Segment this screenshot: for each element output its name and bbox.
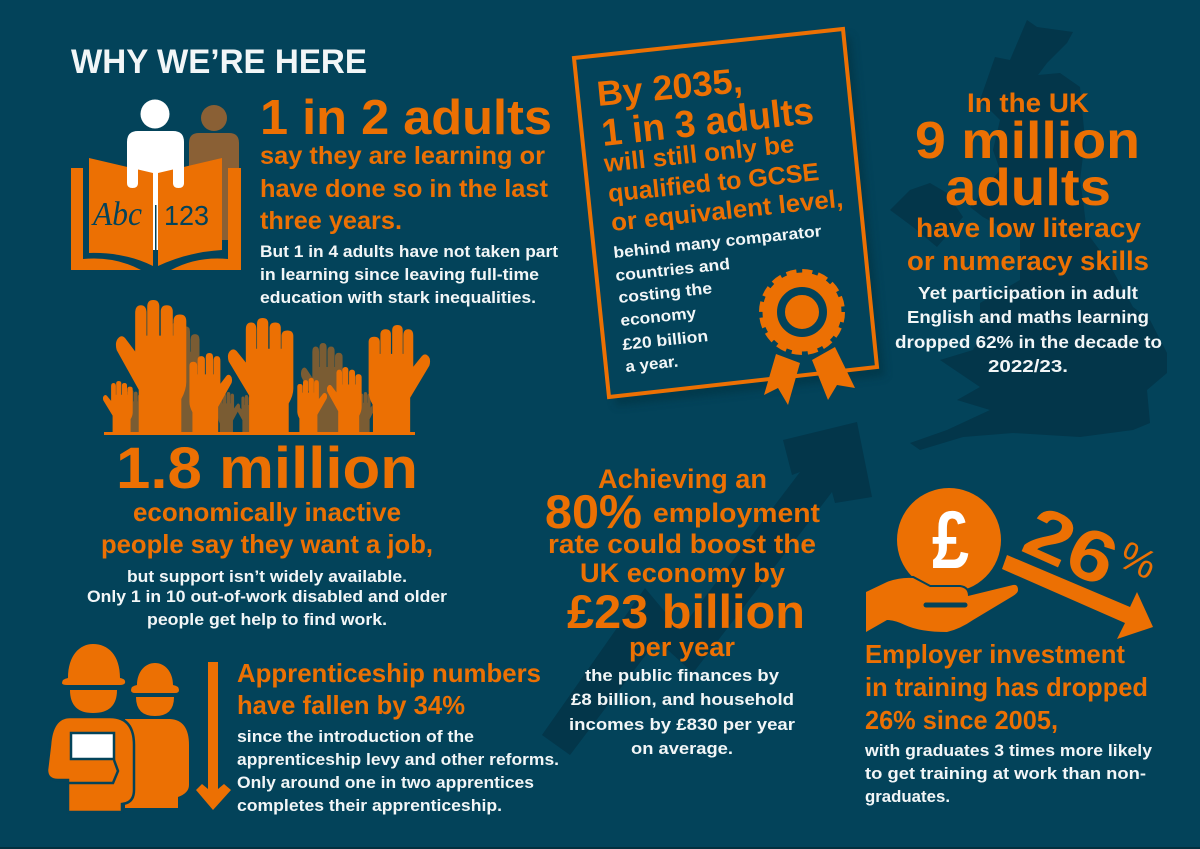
panel: certificate: qualified to GCSE <box>607 158 820 208</box>
title: WHY WE’RE HERE <box>71 43 367 81</box>
icon: people behind open book: Abc <box>91 196 142 233</box>
text block: 1.8 million: 1.8 million <box>116 436 418 501</box>
text block: apprenticeship numbers: have fallen by 34% <box>237 690 465 720</box>
panel: certificate: behind many comparator <box>613 223 822 262</box>
text block: 9 million adults: have low literacy <box>916 213 1141 243</box>
text block: employer investment: to get training at work than non- <box>865 765 1146 783</box>
arrow: apprenticeship decline <box>196 662 231 810</box>
icon: people behind open book: 123 <box>164 200 209 231</box>
text block: apprenticeship numbers: completes their apprenticeship. <box>237 797 502 815</box>
text block: 1 in 2 adults <box>260 91 558 307</box>
icon: two workers in hard hats <box>47 644 189 812</box>
text block: 80% employment <box>545 464 820 758</box>
text block: 9 million adults: adults <box>945 159 1111 217</box>
icon: rosette <box>762 272 855 405</box>
text block: employer investment: 26% since 2005, <box>865 705 1058 735</box>
icon: hand holding pound coin with falling arrow <box>866 488 1163 639</box>
icon: raised hands <box>103 300 430 435</box>
text block: 1.8 million <box>87 436 448 629</box>
text block: 1.8 million: economically inactive <box>133 497 401 527</box>
text block: 1.8 million: people say they want a job, <box>101 529 433 559</box>
text block: 1 in 2 adults: education with stark inequalities. <box>260 288 536 307</box>
text block: 9 million adults <box>895 88 1162 376</box>
text block: apprenticeship numbers: Apprenticeship numbers <box>237 658 541 688</box>
text block: apprenticeship numbers: since the introduction of the <box>237 728 474 746</box>
text block: 80% employment: £8 billion, and household <box>571 690 794 709</box>
text block: employer investment: in training has dropped <box>865 672 1148 702</box>
text block: 9 million adults: Yet participation in adult <box>918 283 1138 303</box>
panel: certificate: economy <box>620 305 697 330</box>
icon: people behind open book <box>71 100 241 270</box>
text block: 80% employment: UK economy by <box>580 558 785 588</box>
panel: certificate: By 2035, <box>595 61 744 114</box>
panel: certificate: £20 billion <box>622 328 709 354</box>
background: rising arrow silhouette <box>542 422 872 755</box>
text block: employer investment: Employer investment <box>865 639 1125 669</box>
text block: 80% employment: the public finances by <box>585 666 780 685</box>
text block: 1 in 2 adults: 1 in 2 adults <box>260 91 552 145</box>
panel: certificate <box>574 29 885 406</box>
text block: 9 million adults: English and maths learning <box>907 307 1149 327</box>
text block: 1 in 2 adults: But 1 in 4 adults have not taken part <box>260 242 558 261</box>
text block: apprenticeship numbers: Only around one in two apprentices <box>237 774 534 792</box>
icon: hand holding pound coin with falling arrow: % <box>1112 533 1163 588</box>
panel: certificate: will still only be <box>602 130 796 178</box>
text block: 1 in 2 adults: three years. <box>260 207 402 235</box>
text block: 9 million adults: 2022/23. <box>988 356 1068 376</box>
text block: 80% employment: per year <box>629 632 735 662</box>
text block: employer investment: with graduates 3 times more likely <box>864 742 1153 760</box>
text block: apprenticeship numbers <box>237 658 559 815</box>
panel: certificate: a year. <box>625 354 679 376</box>
text block: 80% employment: employment <box>653 498 820 528</box>
panel: certificate: 1 in 3 adults <box>599 90 816 155</box>
panel: certificate: costing the <box>618 280 713 307</box>
text block: 1.8 million: people get help to find work. <box>147 611 387 629</box>
text block: employer investment <box>864 639 1153 806</box>
text block: 80% employment: Achieving an <box>598 464 767 494</box>
icon: hand holding pound coin with falling arrow: £ <box>932 495 969 586</box>
panel: certificate: or equivalent level, <box>610 185 844 237</box>
text block: 80% employment: incomes by £830 per year <box>569 715 795 734</box>
text block: 1.8 million: but support isn’t widely available. <box>127 568 407 586</box>
text block: 80% employment: rate could boost the <box>548 529 816 559</box>
text block: employer investment: graduates. <box>865 788 950 806</box>
background: UK map silhouette <box>890 20 1167 450</box>
text block: 9 million adults: 9 million <box>915 112 1140 170</box>
text block: 9 million adults: or numeracy skills <box>907 246 1149 276</box>
text block: 9 million adults: In the UK <box>967 88 1090 118</box>
text block: 80% employment: £23 billion <box>567 585 805 638</box>
text block: apprenticeship numbers: apprenticeship levy and other reforms. <box>237 751 559 769</box>
text block: 80% employment: 80% <box>545 485 642 538</box>
text block: 1 in 2 adults: in learning since leaving full-time <box>260 265 539 284</box>
panel: certificate: countries and <box>615 256 731 285</box>
text block: 1 in 2 adults: say they are learning or <box>260 142 545 170</box>
text block: 1.8 million: Only 1 in 10 out-of-work disabled and older <box>87 588 448 606</box>
text block: 1 in 2 adults: have done so in the last <box>260 175 549 203</box>
text block: 80% employment: on average. <box>631 739 733 758</box>
icon: hand holding pound coin with falling arrow: 26 <box>1012 492 1129 602</box>
text block: 9 million adults: dropped 62% in the decade to <box>895 332 1162 352</box>
